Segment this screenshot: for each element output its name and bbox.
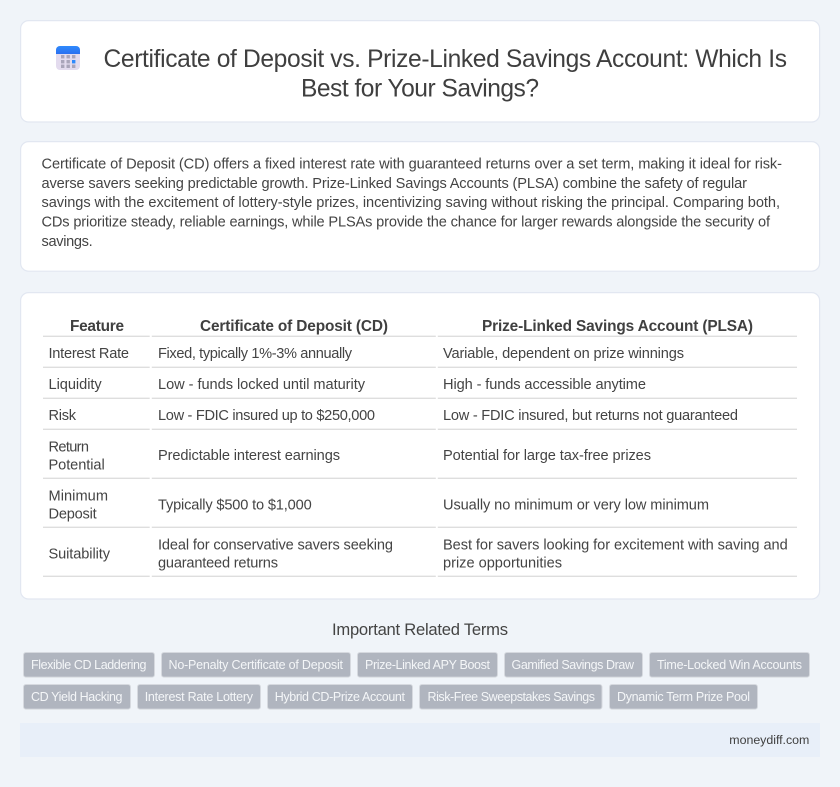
tag: Risk-Free Sweepstakes Savings [428, 690, 595, 704]
tag: Interest Rate Lottery [145, 690, 254, 704]
title [104, 46, 787, 102]
row: risk: Low - FDIC insured, but returns not guaranteed [443, 408, 738, 424]
text block: introduction: Certificate of Deposit (CD) offers a fixed interest rate with guaranteed returns over a set term, making it ideal for risk- [42, 156, 782, 172]
title: Best for Your Savings? [301, 76, 539, 102]
tag: Time-Locked Win Accounts [657, 658, 802, 672]
row: suitability: Suitability [48, 546, 111, 562]
row: liquidity: Low - funds locked until maturity [158, 377, 366, 393]
row: interest rate: Interest Rate [48, 346, 129, 362]
row: liquidity [48, 377, 646, 393]
text block: introduction: savings with the excitement of lottery-style prizes, incentivizing saving without risking the principal. Comparing both, [42, 195, 780, 211]
row: risk: Low - FDIC insured up to $250,000 [158, 408, 375, 424]
tag [650, 652, 810, 677]
table header: Feature [70, 318, 124, 335]
panel: comparison table [21, 293, 820, 599]
tag: Hybrid CD-Prize Account [275, 690, 406, 704]
row: interest rate [48, 346, 684, 362]
row: liquidity: High - funds accessible anytime [443, 377, 646, 393]
tag [24, 684, 130, 709]
tag [610, 684, 758, 709]
tag [138, 684, 260, 709]
tag [162, 652, 350, 677]
row: return potential: Return [48, 440, 89, 456]
row: risk [48, 408, 738, 424]
row: interest rate: Fixed, typically 1%-3% annually [158, 346, 353, 362]
related term tags [24, 652, 810, 709]
tag: CD Yield Hacking [31, 690, 123, 704]
tag [24, 652, 154, 677]
tag: Gamified Savings Draw [512, 658, 635, 672]
row: risk: Risk [48, 408, 77, 424]
row: interest rate: Variable, dependent on prize winnings [443, 346, 684, 362]
text block: introduction: averse savers seeking predictable growth. Prize-Linked Savings Accounts (PLSA) combine the safety of regular [42, 176, 747, 192]
footer [20, 723, 820, 757]
row: minimum deposit: Typically $500 to $1,000 [158, 498, 312, 514]
icon: calendar [56, 46, 80, 70]
title: Certificate of Deposit vs. Prize-Linked Savings Account: Which Is [104, 46, 787, 73]
table header: Prize-Linked Savings Account (PLSA) [482, 318, 753, 335]
footer: moneydiff.com [729, 733, 809, 747]
tag [420, 684, 602, 709]
row: minimum deposit: Usually no minimum or very low minimum [443, 498, 709, 514]
tag: No-Penalty Certificate of Deposit [168, 658, 344, 672]
panel: introduction [21, 142, 820, 271]
row: minimum deposit: Deposit [48, 506, 97, 522]
text block: introduction [42, 156, 782, 250]
row: suitability: Ideal for conservative savers seeking [158, 537, 393, 553]
row: return potential [48, 440, 651, 474]
row: return potential: Potential for large tax-free prizes [443, 448, 651, 464]
tag: Flexible CD Laddering [31, 658, 147, 672]
row: suitability: Best for savers looking for excitement with saving and [443, 537, 788, 553]
row: suitability: guaranteed returns [158, 555, 278, 571]
tag [358, 652, 498, 677]
row: suitability [48, 537, 788, 571]
row: return potential: Potential [48, 458, 105, 474]
tag [504, 652, 642, 677]
tag [268, 684, 412, 709]
text block: introduction: CDs prioritize steady, reliable earnings, while PLSAs provide the chance for larger rewards alongside the security of [42, 215, 771, 231]
row: suitability: prize opportunities [443, 555, 562, 571]
heading: related terms: Important Related Terms [332, 620, 508, 639]
tag: Prize-Linked APY Boost [365, 658, 491, 672]
table header [70, 318, 753, 335]
table header: Certificate of Deposit (CD) [200, 318, 388, 335]
tag: Dynamic Term Prize Pool [617, 690, 750, 704]
row: minimum deposit: Minimum [48, 488, 108, 504]
row: liquidity: Liquidity [48, 377, 102, 393]
panel: header [21, 21, 820, 122]
row: minimum deposit [48, 488, 709, 522]
text block: introduction: savings. [42, 234, 93, 250]
row: return potential: Predictable interest earnings [158, 448, 340, 464]
